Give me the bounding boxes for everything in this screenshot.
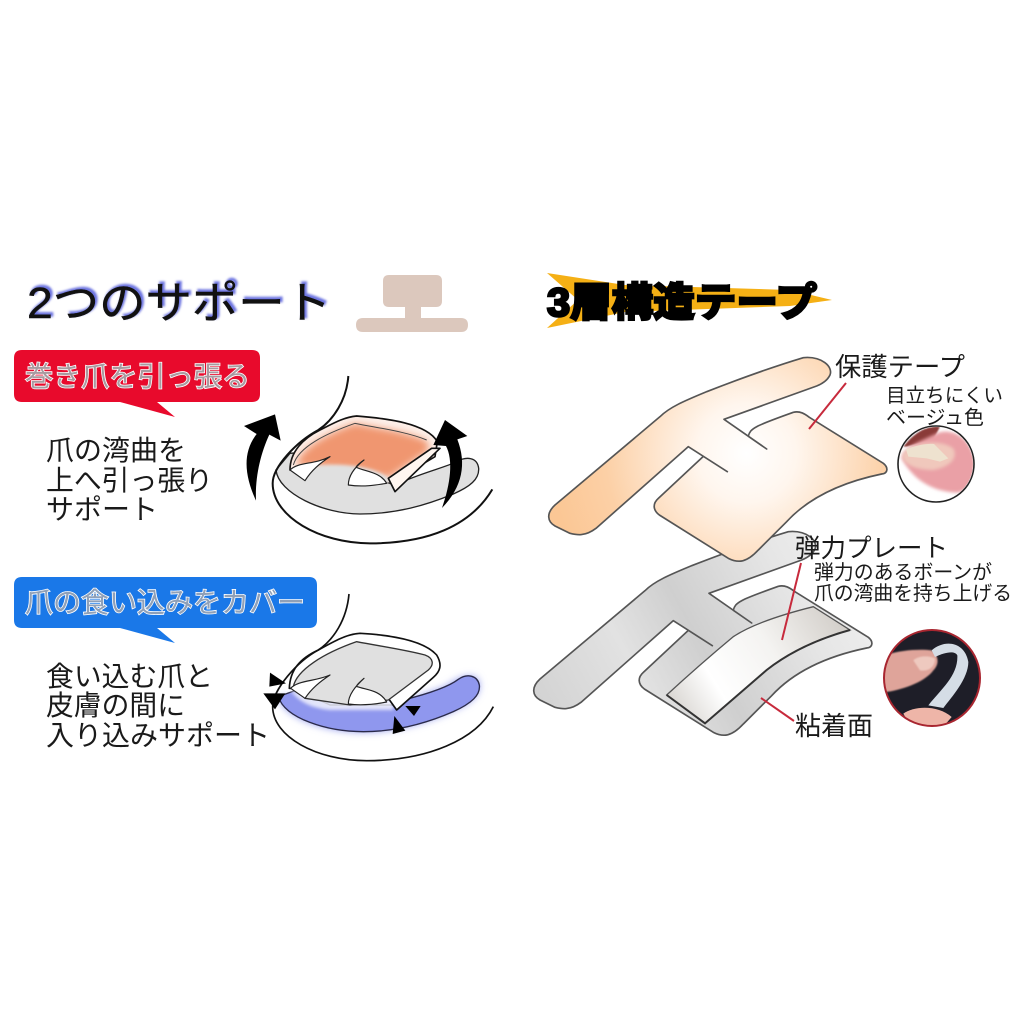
panel: gray elastic layer <box>534 531 872 735</box>
photo: finger bending plate <box>882 630 980 729</box>
text block: pull description: サポート <box>46 494 158 525</box>
text block: beige note <box>886 385 1003 429</box>
nail body <box>293 642 432 705</box>
nail sides <box>290 457 330 481</box>
label: 保護テープ: 保護テープ <box>835 352 965 382</box>
illustration: toe with blue band and triangles <box>263 594 493 761</box>
leader lines <box>761 383 846 721</box>
nail rim <box>289 633 440 710</box>
text block: cover description: 皮膚の間に <box>46 690 185 721</box>
panel: cover ingrown nail <box>14 577 493 761</box>
nail <box>906 444 948 462</box>
callout: blue bubble <box>14 577 317 643</box>
blue band <box>278 676 479 732</box>
starburst <box>547 273 832 328</box>
nail outer rim <box>290 416 437 483</box>
triangle markers <box>263 673 421 734</box>
text block: beige note: 目立ちにくい <box>886 385 1003 407</box>
toe band <box>276 450 479 514</box>
text block: cover description <box>46 661 270 751</box>
elastic plate strip <box>928 644 968 708</box>
text block: plate note: 弾力のあるボーンが <box>814 562 992 584</box>
fingernail <box>913 656 935 671</box>
callout: red bubble: 巻き爪を引っ張る <box>25 361 250 392</box>
heading: 2つのサポート: 2つのサポート <box>27 279 331 328</box>
white fade over band <box>290 690 393 710</box>
tape flap <box>388 448 440 492</box>
gray tape <box>534 531 872 735</box>
upper finger <box>882 650 938 693</box>
photo: toe with tape <box>898 426 975 502</box>
heading: 2つのサポート: 2つのサポート <box>29 277 333 326</box>
panel: beige protective tape <box>549 357 887 561</box>
text block: cover description: 入り込みサポート <box>46 720 270 751</box>
text block: plate note <box>814 562 1012 605</box>
dark skin fold <box>903 426 940 447</box>
text block: pull description <box>46 435 213 525</box>
text block: cover description: 食い込む爪と <box>46 661 213 692</box>
arrow: left <box>244 414 281 501</box>
text block: beige note: ベージュ色 <box>886 407 984 429</box>
elastic plate <box>667 607 850 723</box>
blue glow <box>278 676 479 732</box>
callout: red bubble <box>14 350 260 417</box>
text block: pull description: 上へ引っ張り <box>46 465 213 496</box>
toe outline <box>273 594 493 761</box>
panel: pull curled nail <box>14 350 492 543</box>
label: 粘着面: 粘着面 <box>795 711 873 741</box>
illustration: toe with orange nail and arrows <box>244 376 492 543</box>
toe outline <box>273 376 492 543</box>
heading: 3層構造テープ: 3層構造テープ <box>547 281 817 325</box>
callout: blue bubble: 爪の食い込みをカバー <box>25 587 305 618</box>
nail colour <box>296 423 429 478</box>
nail fold <box>903 443 955 470</box>
text block: plate note: 爪の湾曲を持ち上げる <box>814 583 1012 605</box>
label: 弾力プレート: 弾力プレート <box>795 535 948 563</box>
lower finger <box>903 708 952 725</box>
text block: pull description: 爪の湾曲を <box>46 435 186 466</box>
lower nail fade to gray <box>290 465 390 485</box>
arrow: right <box>433 420 467 508</box>
nail sides <box>291 675 330 698</box>
icon: beige tape shape <box>356 275 468 332</box>
skin <box>902 432 975 493</box>
